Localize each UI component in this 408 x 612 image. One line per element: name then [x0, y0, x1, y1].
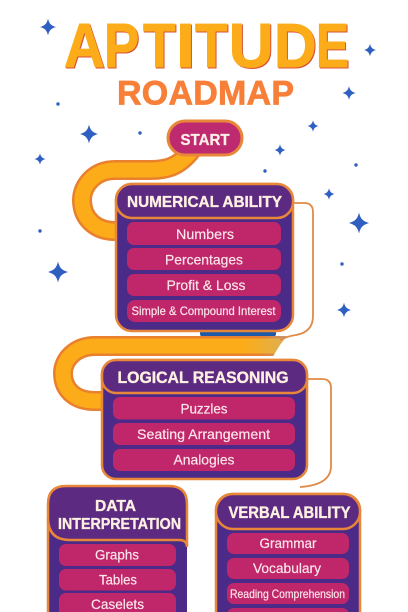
header: verbal ability: VERBAL ABILITY: [228, 504, 350, 522]
item: Profit and Loss: Profit & Loss: [166, 277, 246, 293]
title: E: [316, 12, 349, 80]
item: Tables: Tables: [99, 572, 137, 588]
item: Seating Arrangement: Seating Arrangement: [137, 426, 270, 442]
item: Puzzles: [113, 397, 295, 420]
header: numerical ability: NUMERICAL ABILITY: [127, 194, 282, 211]
item: Percentages: [127, 248, 281, 270]
header: logical reasoning: LOGICAL REASONING: [118, 369, 288, 387]
subtitle: ROADMAP: [117, 74, 294, 112]
item: Grammar: Grammar: [260, 535, 317, 551]
item: Simple and Compound Interest: [127, 300, 281, 322]
panel: data interpretation: [48, 486, 187, 612]
item: Profit and Loss: [127, 274, 281, 296]
connector: numerical ability: [280, 203, 313, 340]
header: numerical ability: [116, 184, 293, 218]
item: Analogies: [113, 449, 295, 471]
header: data interpretation: DATA: [95, 498, 136, 515]
panel: verbal ability: [216, 494, 360, 612]
road: start to numerical ability: [82, 150, 192, 231]
item: Vocabulary: Vocabulary: [253, 560, 321, 576]
connector: logical reasoning: [300, 379, 331, 487]
header: data interpretation: INTERPRETATION: [58, 516, 181, 533]
stars background: [34, 19, 376, 317]
item: Numbers: Numbers: [176, 226, 234, 242]
start badge: [168, 121, 242, 155]
title: [64, 12, 349, 80]
item: Reading Comprehension: Reading Comprehension: [230, 587, 345, 601]
item: Reading Comprehension: [227, 583, 349, 604]
blue strip: [200, 330, 276, 337]
title: A: [64, 12, 104, 80]
item: Simple and Compound Interest: Simple & Compound Interest: [132, 304, 276, 318]
title: U: [229, 12, 273, 80]
header: data interpretation: [48, 486, 187, 547]
item: Grammar: [227, 533, 349, 554]
panel: logical reasoning: [102, 360, 307, 479]
panel: numerical ability: [116, 184, 293, 331]
item: Seating Arrangement: [113, 423, 295, 445]
item: Analogies: Analogies: [174, 452, 234, 468]
road: numerical to logical: [63, 334, 298, 401]
title: T: [143, 12, 176, 80]
item: Percentages: Percentages: [165, 252, 243, 268]
header: verbal ability: [216, 494, 360, 529]
item: Caselets: Caselets: [91, 596, 144, 612]
item: Puzzles: Puzzles: [180, 400, 228, 416]
start badge: START: [180, 132, 230, 149]
item: Vocabulary: [227, 558, 349, 579]
item: Numbers: [127, 222, 281, 245]
title: I: [176, 12, 195, 80]
header: logical reasoning: [102, 360, 307, 393]
item: cropped bottom row: [227, 608, 349, 612]
title: T: [195, 12, 228, 80]
title: P: [104, 12, 139, 80]
item: Graphs: Graphs: [95, 546, 139, 562]
title: D: [274, 12, 316, 80]
